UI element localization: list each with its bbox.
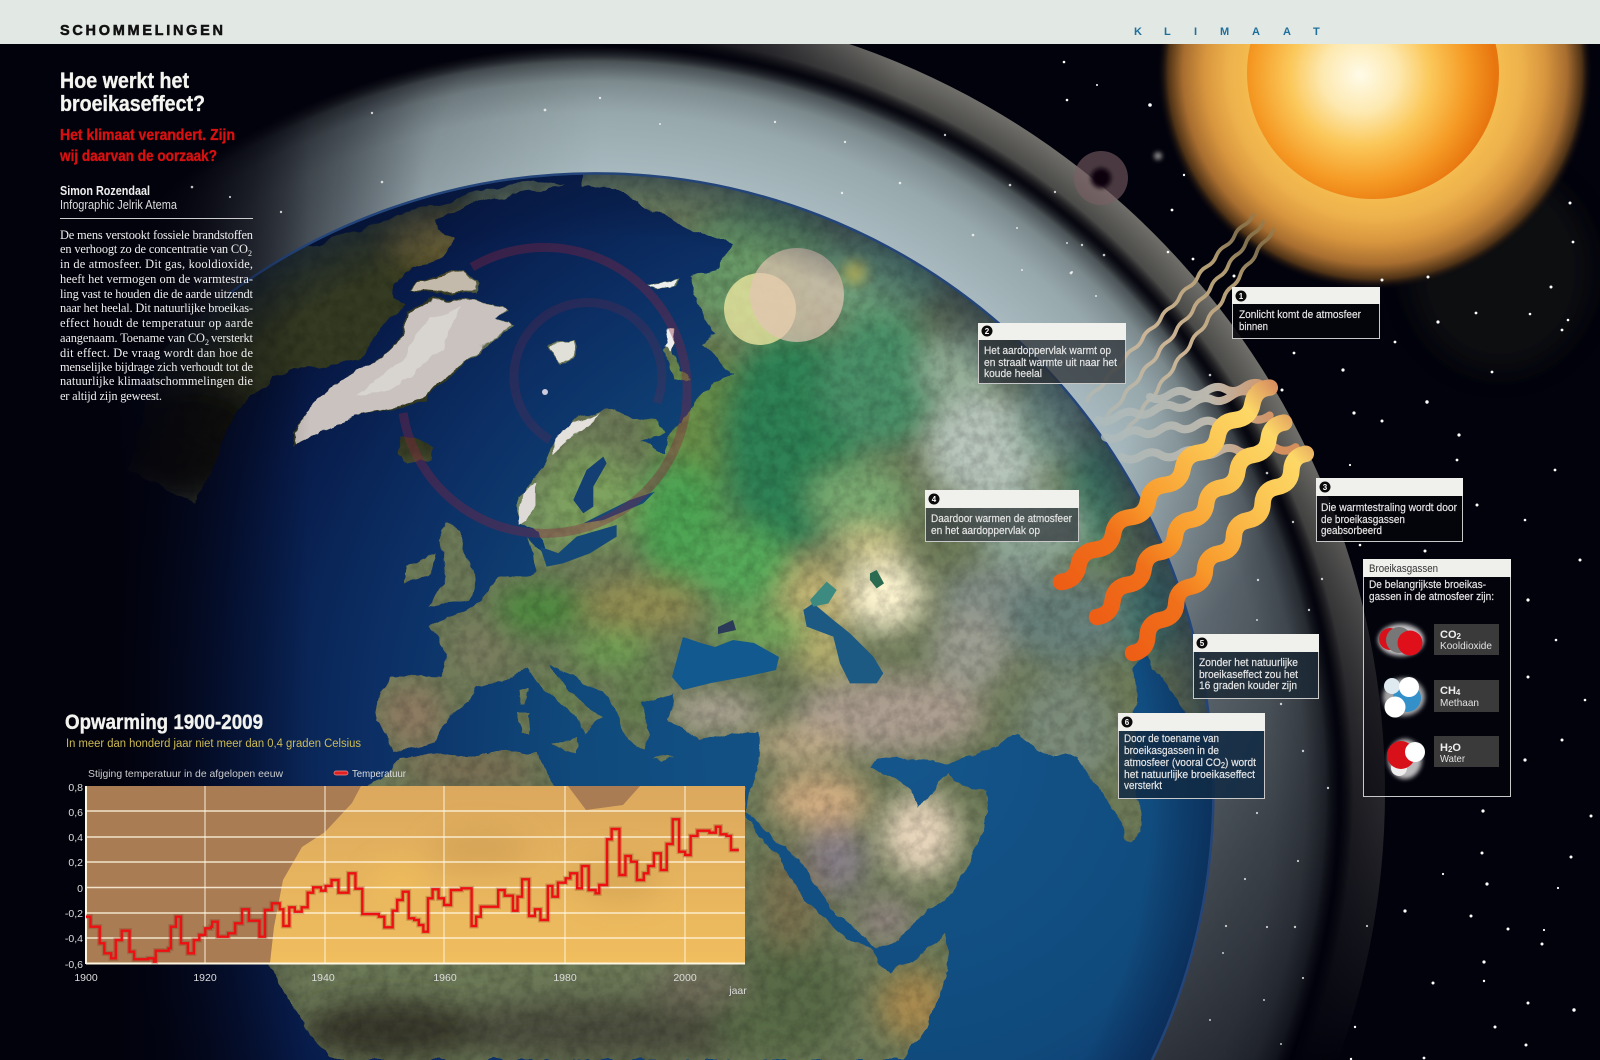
callout 3: geabsorbeerd <box>1321 525 1382 537</box>
intro text: er altijd zijn geweest. <box>60 389 162 403</box>
callout 4 <box>925 490 1079 542</box>
y axis labels <box>65 782 83 971</box>
top header bar <box>0 0 1600 44</box>
callout 6: atmosfeer (vooral CO <box>1124 757 1227 769</box>
panel: greenhouse gases <box>1363 559 1511 796</box>
callout 5 <box>1193 634 1319 698</box>
callout 5: 5 <box>1200 639 1205 648</box>
section name: L <box>1164 26 1171 38</box>
chart heading: In meer dan honderd jaar niet meer dan 0,4 graden Celsius <box>66 738 361 750</box>
label: H2O: H <box>1440 742 1448 754</box>
x axis labels: 1940 <box>311 972 335 984</box>
section name: T <box>1313 26 1320 38</box>
sun <box>1157 0 1593 370</box>
callout 5: Zonder het natuurlijke <box>1199 657 1298 669</box>
label: CH4 <box>1434 680 1499 712</box>
arrows: heat absorbed by greenhouse gases <box>1061 388 1306 653</box>
intro text: effect houdt de temperatuur op aarde <box>60 316 254 330</box>
byline <box>60 184 253 219</box>
x axis labels: 1920 <box>193 972 217 984</box>
panel: greenhouse gases: De belangrijkste broeikas- <box>1369 579 1486 591</box>
intro text: 2 <box>205 338 209 347</box>
subtitle: wij daarvan de oorzaak? <box>59 148 217 165</box>
x axis labels <box>74 972 747 997</box>
y axis labels: 0,6 <box>68 807 83 819</box>
molecule: H2O <box>1387 739 1425 779</box>
callout 6: broeikasgassen in de <box>1124 745 1219 757</box>
subtitle <box>59 127 235 165</box>
callout 2: koude heelal <box>984 368 1042 380</box>
section name: I <box>1194 26 1197 38</box>
ice sheets and snow <box>295 272 678 523</box>
x axis labels: 2000 <box>673 972 697 984</box>
callout 3: Die warmtestraling wordt door <box>1321 502 1457 514</box>
callout 6 <box>1118 713 1265 798</box>
earth limb line <box>230 173 1213 1060</box>
callout 2: 2 <box>985 327 990 336</box>
ocean <box>158 174 1212 1060</box>
line chart: temperature <box>65 768 747 997</box>
callout 6: 2 <box>1221 761 1226 770</box>
molecule: CH4 <box>1383 677 1425 718</box>
chart heading <box>65 711 361 750</box>
left fade to black <box>0 44 310 1060</box>
intro text: menselijke bijdrage zich verhoudt tot de <box>60 360 254 374</box>
intro text: dit effect. De vraag wordt dan hoe de <box>60 346 254 360</box>
label: CO2 <box>1434 624 1499 655</box>
callout 2: en straalt warmte uit naar het <box>984 357 1117 369</box>
earth globe <box>158 174 1212 1060</box>
intro text: en verhoogt zo de concentratie van CO <box>60 242 248 256</box>
label: CH4: CH <box>1440 685 1456 697</box>
section label: SCHOMMELINGEN <box>60 23 223 39</box>
section name: M <box>1220 26 1229 38</box>
title: broeikaseffect? <box>60 91 205 116</box>
callout 3: de broeikasgassen <box>1321 514 1405 526</box>
y axis labels: -0,6 <box>65 959 83 971</box>
section name <box>1134 26 1320 38</box>
chart legend <box>88 768 406 780</box>
chart plot area <box>86 786 745 963</box>
intro text: aangenaam. Toename van CO <box>60 331 205 345</box>
callout 2 <box>978 323 1126 384</box>
lens flare circles <box>724 248 867 345</box>
x axis labels: 1980 <box>553 972 577 984</box>
lens flare: dark disc near atmosphere edge <box>1074 151 1162 205</box>
intro text: De mens verstookt fossiele brandstoffen <box>60 228 253 242</box>
intro text: naar het heelal. Dit natuurlijke broeikas- <box>60 301 253 315</box>
intro text <box>60 228 254 403</box>
label: CO2: CO <box>1440 629 1456 641</box>
intro text: 2 <box>248 249 252 258</box>
inland seas <box>540 457 884 690</box>
label: H2O: 2 <box>1448 745 1453 754</box>
polar glow rings <box>403 247 687 533</box>
label: CO2: 2 <box>1456 632 1462 641</box>
panel: greenhouse gases: Broeikasgassen <box>1369 563 1438 575</box>
byline: Simon Rozendaal <box>60 184 150 198</box>
title <box>60 68 205 116</box>
y axis labels: 0 <box>77 883 83 895</box>
callout 4: Daardoor warmen de atmosfeer <box>931 513 1072 525</box>
callout 3 <box>1316 478 1463 542</box>
label: H2O <box>1434 736 1499 767</box>
chart legend: Stijging temperatuur in de afgelopen eeuw <box>88 768 283 780</box>
callout 6: het natuurlijke broeikaseffect <box>1124 769 1255 781</box>
label: CH4: Methaan <box>1440 697 1479 709</box>
molecule: CO2 <box>1378 624 1424 656</box>
callout 4: en het aardoppervlak op <box>931 525 1040 537</box>
x axis labels: jaar <box>728 985 747 997</box>
intro text: in de atmosfeer. Dit gas, kooldioxide, <box>60 257 253 271</box>
arrows: outgoing heat radiation <box>1098 383 1296 460</box>
arrows: incoming sunlight rays <box>1087 215 1273 433</box>
panel: greenhouse gases: gassen in de atmosfeer zijn: <box>1369 591 1494 603</box>
x axis labels: 1960 <box>433 972 457 984</box>
callout 4: 4 <box>932 495 937 504</box>
chart gridlines <box>86 786 745 964</box>
y axis labels: 0,4 <box>68 832 83 844</box>
chart legend: Temperatuur <box>352 768 406 780</box>
intro text: heeft het vermogen om de warmtestra- <box>60 272 253 286</box>
callout 6: versterkt <box>1124 780 1162 792</box>
label: CO2: Kooldioxide <box>1440 640 1492 652</box>
callout 6: 6 <box>1125 718 1130 727</box>
callout 3: 3 <box>1323 483 1328 492</box>
intro text: natuurlijke klimaatschommelingen die <box>60 374 254 388</box>
section name: A <box>1252 26 1260 38</box>
subtitle: Het klimaat verandert. Zijn <box>60 127 235 144</box>
callout 6: Door de toename van <box>1124 733 1219 745</box>
x axis labels: 1900 <box>74 972 98 984</box>
callout 2: Het aardoppervlak warmt op <box>984 345 1111 357</box>
label: H2O: O <box>1452 742 1461 754</box>
section name: A <box>1283 26 1291 38</box>
y axis labels: -0,4 <box>65 933 83 945</box>
callout 6: ) wordt <box>1225 757 1256 769</box>
black sea <box>672 637 779 690</box>
section name: K <box>1134 26 1142 38</box>
title: Hoe werkt het <box>60 68 190 93</box>
callout 5: broeikaseffect zou het <box>1199 669 1298 681</box>
callout 5: 16 graden kouder zijn <box>1199 680 1297 692</box>
y axis labels: 0,8 <box>68 782 83 794</box>
chart heading: Opwarming 1900-2009 <box>65 711 263 734</box>
callout 1: Zonlicht komt de atmosfeer <box>1239 309 1361 321</box>
y axis labels: -0,2 <box>65 908 83 920</box>
intro text: ling vast te houden die de aarde uitzendt <box>60 287 254 301</box>
callout 1: binnen <box>1239 321 1268 333</box>
temperature line <box>86 819 739 962</box>
intro text: versterkt <box>211 331 254 345</box>
atmosphere <box>186 44 1385 1060</box>
limb shading <box>184 174 1212 1060</box>
label: CH4: 4 <box>1456 688 1461 697</box>
land masses <box>149 174 1208 1060</box>
callout 1 <box>1232 287 1380 338</box>
label: H2O: Water <box>1440 753 1465 765</box>
y axis labels: 0,2 <box>68 857 83 869</box>
callout 1: 1 <box>1239 292 1244 301</box>
byline: Infographic Jelrik Atema <box>60 198 177 212</box>
